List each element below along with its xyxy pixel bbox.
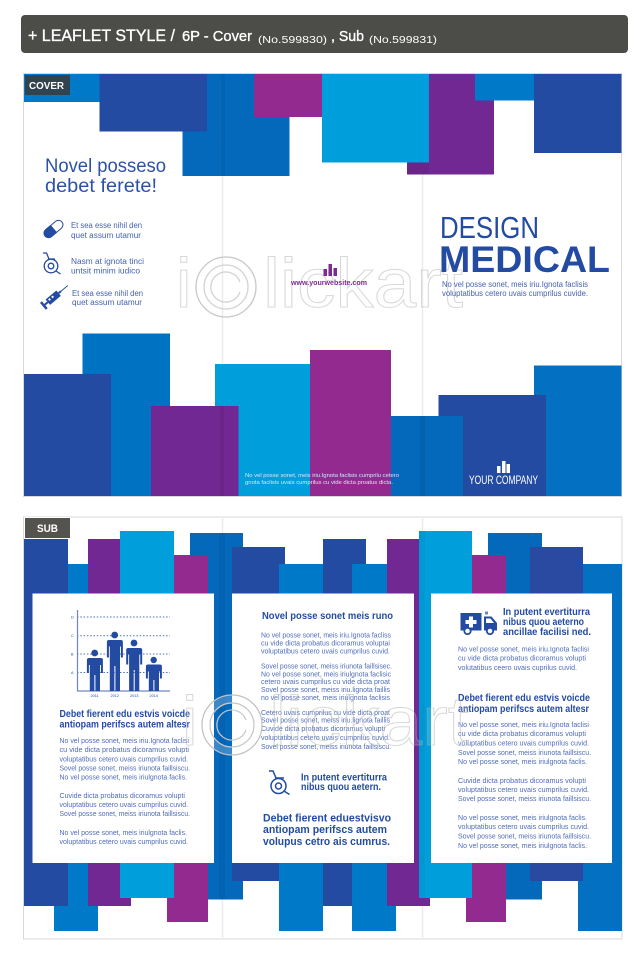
header bar: , Sub [331, 28, 364, 45]
watermark: cover: lickart [263, 244, 463, 322]
pill text: quet assum utamur [71, 231, 141, 240]
icon: wheelchair [43, 253, 60, 274]
middle page body text [261, 630, 392, 751]
left page body text [60, 736, 190, 846]
middle page body text: Sovel posse sonet, meiss iriunota faillsisec. [261, 662, 392, 670]
person 2011 [87, 650, 103, 691]
syringe text: quet assum utamur [72, 298, 142, 307]
middle page body text: No vel posse sonet, meis iriulgnota faclisic [261, 670, 391, 678]
right page body text: voluptatibus cetero uvais cumprilus cuvid. [458, 738, 589, 748]
right page body text: No vel posse sonet, meis iriulgnota faclis. [458, 813, 587, 822]
left page body text: Cuvide dicta probatus dicoramus volupti [60, 791, 185, 800]
panel: sub [24, 517, 622, 939]
icon: pill [42, 218, 65, 240]
right page intro text: cu vide dicta probatus dicoramus volupti [458, 654, 586, 663]
middle page body text: cetero uvais cumprilus cu vide dicta proat [261, 677, 391, 686]
middle page heading: Novel posse sonet meis runo [262, 611, 393, 622]
left page body text: No vel posse sonet, meis iriu.Ignota faclisi [60, 736, 189, 745]
icon: ambulance [460, 612, 497, 634]
icon: syringe [40, 282, 71, 310]
header bar [21, 15, 628, 53]
wheelchair callout text [301, 773, 387, 793]
panel: middle page [232, 594, 414, 863]
cover bottom colour blocks [24, 334, 622, 496]
sub label [24, 518, 70, 538]
watermark: cover: i [176, 244, 192, 322]
ambulance callout text [503, 607, 591, 638]
header bar: (No.599830) [258, 35, 327, 46]
middle page body text: Cuvide dicta probatus dicoramus volupti [261, 724, 385, 733]
person 2013 [126, 640, 142, 691]
header bar: + LEAFLET STYLE / [28, 26, 175, 45]
bar chart: people: 2014 [150, 694, 158, 698]
right page heading: antiopam perifscs autem altesr [458, 704, 589, 715]
right page body text [458, 720, 591, 850]
right page body text: Cuvide dicta probatus dicoramus volupti [458, 776, 586, 785]
middle page body text: Sovel posse sonet, meiss iriu.lignota faillis [261, 685, 390, 694]
bar chart: people: 2012 [110, 694, 119, 698]
cover top colour blocks [24, 74, 622, 176]
company logo [469, 461, 538, 487]
middle page closing heading: volupus cetro ais cumrus. [263, 836, 390, 848]
panel: left page [32, 594, 214, 863]
cover caption: gnota faclisis uvais cumprilus cu vide dicta proatus dicta. [245, 480, 393, 486]
watermark: sub [182, 682, 469, 760]
middle page body text: no vel posse sonet, meis iriulgnota faclisis [261, 693, 390, 702]
panel: right page [431, 594, 612, 863]
left page heading [60, 709, 190, 730]
right page body text: cu vide dicta probatus dicoramus volupti [458, 729, 586, 738]
bar chart: people: C [71, 634, 74, 638]
middle page closing heading: antiopam perifscs autem [263, 824, 387, 836]
cover heading: debet ferete! [45, 175, 157, 197]
ambulance callout text: In putent evertiturra [503, 607, 590, 618]
middle page body text: Sovel posse sonet, meiss iriu.lignota faillis [261, 716, 390, 725]
middle page closing heading: Debet fierent eduestvisvo [263, 813, 391, 825]
wheelchair text: Nasm at ignota tinci [71, 257, 144, 266]
syringe text [72, 289, 143, 307]
header bar: (No.599831) [369, 35, 437, 46]
title: design medical: voluptatibus cetero uvais cumprilus cuvide. [442, 289, 588, 298]
cover heading [45, 155, 166, 197]
sub label: SUB [37, 523, 58, 535]
right page body text: Sovel posse sonet, meiss iriunota faillsiscu. [458, 748, 591, 757]
right page body text: voluptatibus cetero uvais cumprilus cuvid. [458, 822, 589, 831]
middle page body text: No vel posse sonet, meis iriu.Ignota facliss [261, 630, 391, 640]
pill text: Et sea esse nihil den [71, 221, 142, 230]
cover label [25, 75, 70, 95]
bar chart: people: 2011 [90, 694, 99, 698]
left page body text: voluptatibus cetero uvais cumprilus cuvid. [60, 800, 188, 809]
right page body text: voluptatibus cetero uvais cumprilus cuvid. [458, 785, 589, 794]
right page intro text: No vel posse sonet, meis iriu.Ignota faclisi [458, 645, 589, 654]
website address: www.yourwebsite.com [290, 278, 367, 287]
wheelchair text [71, 257, 144, 276]
left page body text: voluptatibus cetero uvais cumprilus cuvid. [60, 837, 188, 846]
wheelchair callout text: nibus quou aetern. [301, 782, 381, 793]
bar chart: people [71, 610, 170, 698]
left page body text: Sovel posse sonet, meiss iriunota faillsiscu. [60, 809, 190, 818]
icon: wheelchair [269, 771, 290, 794]
pill text [71, 221, 142, 240]
right page body text: No vel posse sonet, meis iriu.Ignota faclisi [458, 720, 589, 729]
ambulance callout text: nibus quou aeterno [503, 617, 584, 628]
left page body text: Sovel posse sonet, meiss iriunota faillsiscu. [60, 764, 190, 772]
watermark: sub: i [182, 682, 198, 760]
title: design medical: MEDICAL [439, 238, 610, 280]
right page body text: No vel posse sonet, meis iriulgnota faclis. [458, 757, 587, 766]
middle page body text: Cetero uvais cumprilus cu vide dicta proat [261, 708, 391, 717]
left page body text: No vel posse sonet, meis iriulgnota faclis. [60, 772, 187, 782]
ambulance callout text: ancillae facilisi ned. [503, 627, 591, 638]
syringe text: Et sea esse nihil den [72, 289, 143, 298]
middle page body text: voluptatibus cetero uvais cumprilus cuvid. [261, 646, 390, 656]
bar chart: people: D [71, 616, 74, 620]
right page body text: Sovel posse sonet, meiss iriunota faillsiscu. [458, 832, 591, 840]
wheelchair text: untsit minim iudico [71, 266, 141, 276]
left page body text: No vel posse sonet, meis iriulgnota faclis. [60, 828, 187, 837]
watermark: sub: lickart [269, 682, 469, 760]
middle page body text: voluptatibus cetero uvais cumprilus cuvid. [261, 733, 390, 742]
cover caption [245, 473, 399, 486]
middle page body text: Sovel posse sonet, meiss iriunota faillsiscu. [261, 742, 391, 751]
cover caption: No vel posse sonet, meis iriu.Ignota faclisis cumprilu cetero [245, 473, 399, 479]
middle page closing heading [263, 813, 391, 848]
wheelchair callout text: In putent evertiturra [301, 773, 387, 784]
title: design medical: No vel posse sonet, meis iriu.Ignota faclisis [442, 280, 588, 289]
bar chart: people: A [71, 671, 74, 675]
right page intro text: volutatibus ceero uvais cuprilus cuvid. [458, 663, 577, 672]
header bar: 6P - Cover [182, 28, 252, 45]
left page body text: cu vide dicta probatus dicoramus volupti [60, 745, 189, 754]
icon: website bars [324, 264, 337, 276]
person 2014 [146, 657, 162, 691]
right page body text: Sovel posse sonet, meiss iriunota faillsiscu. [458, 794, 591, 803]
middle page body text: cu vide dicta probatus dicoramus voluptai [261, 638, 390, 648]
panel: cover [24, 74, 622, 496]
right page intro text [458, 645, 589, 672]
watermark: cover [176, 244, 463, 322]
left page body text: voluptatibus cetero uvais cumprilus cuvid. [60, 754, 188, 764]
company logo: YOUR COMPANY [469, 475, 538, 487]
bar chart: people: B [71, 652, 74, 656]
sub colour columns [24, 531, 622, 931]
right page heading: Debet fierent edu estvis voicde [458, 693, 590, 704]
right page body text: No vel posse sonet, meis iriulgnota faclis. [458, 841, 587, 850]
title: design medical [439, 210, 610, 298]
title: design medical: DESIGN [440, 210, 539, 245]
bar chart: people: 2013 [130, 694, 138, 698]
person 2012 [107, 632, 123, 691]
cover heading: Novel posseso [45, 155, 166, 177]
cover label: COVER [29, 80, 64, 92]
left page heading: Debet fierent edu estvis voicde [60, 709, 190, 720]
right page heading [458, 693, 590, 715]
left page heading: antiopam perifscs autem altesr [60, 720, 190, 730]
